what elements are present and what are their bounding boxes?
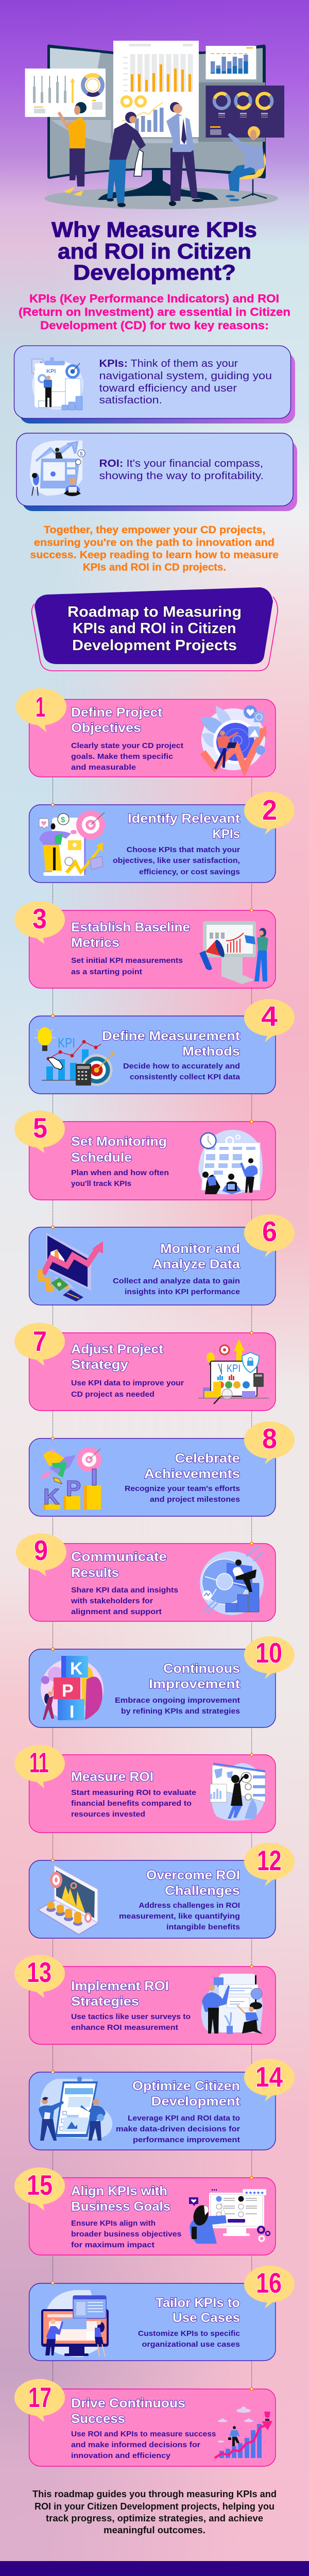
step 9 heading: Results	[71, 1566, 119, 1580]
step 12 heading: Overcome ROI	[146, 1868, 240, 1883]
connector node	[250, 2176, 253, 2179]
closing intro text: success. Keep reading to learn how to measure	[30, 549, 279, 561]
connector node	[52, 1648, 54, 1651]
icon: stacked KPI blocks: P	[62, 1681, 74, 1701]
title: and ROI in Citizen	[58, 239, 251, 263]
step 14 heading	[132, 2079, 241, 2109]
number bubble 4	[244, 999, 295, 1042]
number bubble 17: 17	[28, 2381, 52, 2413]
step 2 description: objectives, like user satisfaction,	[113, 856, 240, 865]
number bubble 6: 6	[262, 1215, 277, 1247]
step 2 description: Choose KPIs that match your	[127, 845, 240, 854]
number bubble 11	[14, 1745, 65, 1788]
connector node	[52, 1014, 54, 1018]
step 12 description	[119, 1901, 240, 1931]
step 14 description: performance improvement	[133, 2136, 240, 2144]
step 6 heading	[152, 1242, 241, 1272]
step 6 heading: Monitor and	[160, 1242, 240, 1256]
number bubble 14: 14	[255, 2061, 283, 2093]
panel: step 9	[16, 1533, 276, 1621]
number bubble 11: 11	[29, 1747, 48, 1778]
panel: ROI explanation	[16, 433, 297, 511]
icon: stacked KPI blocks	[41, 1656, 104, 1722]
number bubble 1: 1	[36, 691, 45, 723]
icon: KPI clipboard: KPI	[46, 368, 56, 375]
step 5 heading: Schedule	[71, 1150, 132, 1165]
step 16 heading: Use Cases	[173, 2311, 240, 2325]
step 9 description: Share KPI data and insights	[71, 1586, 178, 1595]
panel: step 4	[29, 999, 295, 1094]
step 3 description	[71, 956, 183, 976]
icon: monitor with rising pink arrow and coins	[38, 1233, 103, 1301]
connector node	[250, 1542, 253, 1545]
panel: step 11	[14, 1745, 276, 1833]
closing intro text: KPIs and ROI in CD projects.	[83, 562, 226, 573]
ROI text	[99, 457, 264, 482]
roadmap heading banner: KPIs and ROI in Citizen	[73, 620, 236, 637]
step 1 description: goals. Make them specific	[71, 752, 173, 761]
icon: KPI board with shield and coins	[198, 1339, 269, 1404]
roadmap heading banner	[32, 587, 278, 671]
step 7 description	[71, 1379, 184, 1399]
panel: step 7	[14, 1323, 276, 1411]
KPI text: KPIs: Think of them as your	[99, 358, 238, 369]
step 12 description: intangible benefits	[166, 1923, 240, 1931]
step 5 description: Plan when and how often	[71, 1168, 169, 1177]
step 15 description: broader business objectives	[71, 2230, 181, 2239]
step 17 description	[71, 2430, 216, 2460]
step 1 heading	[71, 705, 163, 735]
dark donut panel	[206, 86, 284, 138]
connector node	[250, 2387, 253, 2391]
panel: step 3	[14, 901, 276, 988]
icon: climbing bar chart with trophy	[215, 2406, 272, 2458]
step 9 heading	[71, 1550, 167, 1580]
step 17 description: innovation and efficiency	[71, 2451, 171, 2460]
step 17 description: and make informed decisions for	[71, 2441, 200, 2449]
KPI text: navigational system, guiding you	[99, 370, 272, 382]
number bubble 16: 16	[256, 2267, 282, 2299]
number bubble 13	[14, 1955, 65, 1998]
step 13 heading: Strategies	[71, 1994, 139, 2009]
ROI text: ROI: It's your financial compass,	[99, 457, 263, 469]
number bubble 7	[14, 1323, 65, 1366]
closing statement	[32, 2489, 277, 2535]
number bubble 4: 4	[261, 1000, 278, 1032]
connector node	[250, 909, 253, 912]
step 15 heading: Align KPIs with	[71, 2184, 167, 2198]
step 8 heading	[144, 1451, 240, 1481]
ROI text: showing the way to profitability.	[99, 470, 264, 482]
panel: step 8	[29, 1421, 295, 1516]
panel: step 10	[29, 1636, 295, 1727]
KPI text	[99, 358, 272, 406]
icon: KPI podium with rocket rider: P	[66, 1476, 81, 1501]
left chart panel	[25, 69, 106, 117]
step 15 description: for maximum impact	[71, 2241, 154, 2249]
step 10 heading	[149, 1662, 241, 1691]
connector node	[52, 803, 54, 806]
step 6 description: insights into KPI performance	[125, 1287, 240, 1296]
number bubble 5: 5	[33, 1112, 47, 1144]
icon: KPI chart, bulb, calculator and target: KPI	[58, 1035, 75, 1050]
step 9 heading: Communicate	[71, 1550, 167, 1564]
step 4 description: Decide how to accurately and	[123, 1062, 240, 1071]
step 4 heading: Define Measurement	[102, 1029, 241, 1043]
step 16 description: Customize KPIs to specific	[138, 2329, 240, 2338]
step 10 description	[115, 1696, 240, 1716]
hero illustration: team reviewing KPI dashboards	[25, 41, 284, 209]
number bubble 5	[14, 1111, 65, 1153]
number bubble 8: 8	[262, 1422, 277, 1454]
step 13 description: Use tactics like user surveys to	[71, 2012, 191, 2021]
title: Development?	[73, 260, 236, 284]
step 5 description	[71, 1168, 169, 1188]
step 1 heading: Define Project	[71, 705, 163, 720]
step 3 heading: Metrics	[71, 936, 119, 950]
number bubble 13: 13	[27, 1956, 52, 1988]
icon: KPI clipboard	[32, 357, 83, 410]
connector node	[52, 1226, 54, 1229]
icon: team customizing monitor layout	[41, 2290, 109, 2357]
number bubble 9: 9	[34, 1534, 48, 1566]
icon: team with survey phone	[201, 1974, 263, 2034]
number bubble 8	[244, 1421, 295, 1464]
step 7 heading: Adjust Project	[71, 1342, 164, 1357]
step 5 description: you'll track KPIs	[71, 1179, 131, 1188]
step 2 description: efficiency, or cost savings	[139, 868, 240, 876]
step 13 heading: Implement ROI	[71, 1979, 169, 1993]
title	[52, 217, 257, 284]
step 15 heading	[71, 2184, 170, 2214]
central chart panel	[113, 41, 199, 137]
icon: team planning schedule	[198, 1130, 263, 1194]
connector node	[250, 1753, 253, 1756]
step 4 description: consistently collect KPI data	[130, 1073, 241, 1081]
step 7 description: Use KPI data to improve your	[71, 1379, 184, 1387]
step 2 heading: KPIs	[212, 827, 240, 841]
title: Why Measure KPIs	[52, 217, 257, 242]
step 12 description: measurement, like quantifying	[119, 1912, 240, 1921]
connector lines	[53, 777, 252, 2396]
step 4 heading	[102, 1029, 241, 1059]
number bubble 6	[244, 1214, 295, 1257]
icon: person with target and yellow arrow: $	[61, 816, 65, 824]
step 13 heading	[71, 1979, 169, 2009]
step 12 description: Address challenges in ROI	[139, 1901, 240, 1910]
icon: two people with checklist board	[39, 2077, 112, 2141]
step 10 heading: Improvement	[149, 1677, 241, 1691]
footer	[0, 2561, 309, 2576]
number bubble 3	[14, 901, 65, 944]
connector node	[250, 1331, 253, 1334]
step 8 heading: Achievements	[144, 1467, 240, 1481]
number bubble 2: 2	[262, 794, 277, 826]
icon: ROI growth dashboard: $	[80, 451, 83, 457]
step 2 description	[113, 845, 240, 876]
number bubble 10	[244, 1636, 295, 1679]
panel: KPIs explanation	[14, 346, 295, 423]
step 17 description: Use ROI and KPIs to measure success	[71, 2430, 216, 2438]
closing intro text	[30, 524, 279, 573]
step 10 heading: Continuous	[163, 1662, 240, 1676]
icon: KPI board with shield and coins: KPI	[227, 1363, 241, 1375]
closing statement: track progress, optimize strategies, and achieve	[46, 2513, 263, 2523]
step 15 description: Ensure KPIs align with	[71, 2219, 156, 2228]
panel: step 6	[29, 1214, 295, 1305]
connector node	[52, 2071, 54, 2074]
step 16 heading	[156, 2296, 240, 2325]
step 12 heading	[146, 1868, 240, 1898]
connector node	[52, 2281, 54, 2284]
number bubble 16	[244, 2266, 295, 2309]
connector node	[250, 1965, 253, 1968]
icon: KPI podium with rocket rider	[41, 1447, 101, 1510]
step 11 description: financial benefits compared to	[71, 1799, 192, 1808]
number bubble 15: 15	[27, 2169, 53, 2201]
step 11 heading: Measure ROI	[71, 1770, 153, 1784]
intro text	[19, 292, 290, 332]
step 9 description: alignment and support	[71, 1607, 162, 1616]
icon: donut chart with seated person	[200, 1546, 264, 1615]
step 9 description: with stakeholders for	[71, 1597, 153, 1605]
step 14 heading: Development	[151, 2094, 241, 2109]
number bubble 14	[244, 2059, 295, 2102]
step 15 description	[71, 2219, 181, 2249]
icon: woman selecting ratings on monitor	[189, 2189, 270, 2244]
number bubble 12	[244, 1843, 295, 1886]
step 8 heading: Celebrate	[175, 1451, 240, 1466]
intro text: KPIs (Key Performance Indicators) and ROI	[29, 292, 279, 305]
step 2 heading: Identify Relevant	[128, 811, 241, 826]
step 6 description	[113, 1277, 240, 1296]
closing statement: ROI in your Citizen Development projects, helping you	[35, 2501, 274, 2512]
step 1 description: Clearly state your CD project	[71, 741, 183, 750]
number bubble 12: 12	[257, 1844, 281, 1876]
step 7 heading	[71, 1342, 164, 1372]
step 14 description: Leverage KPI and ROI data to	[128, 2114, 240, 2123]
step 3 description: Set initial KPI measurements	[71, 956, 183, 965]
KPI text: toward efficiency and user	[99, 382, 237, 394]
step 13 description	[71, 2012, 191, 2032]
icon: KPI chart, bulb, calculator and target	[34, 1026, 114, 1086]
top right chart panel	[206, 46, 256, 79]
intro text: Development (CD) for two key reasons:	[40, 319, 269, 332]
icon: ROI growth dashboard	[30, 440, 85, 496]
panel: step 15	[14, 2167, 276, 2255]
roadmap heading banner: Development Projects	[72, 637, 237, 654]
step 6 heading: Analyze Data	[152, 1257, 241, 1272]
step 15 heading: Business Goals	[71, 2199, 170, 2214]
step 16 heading: Tailor KPIs to	[156, 2296, 240, 2310]
connector node	[250, 1120, 253, 1123]
step 10 description: Embrace ongoing improvement	[115, 1696, 240, 1705]
step 3 heading: Establish Baseline	[71, 920, 190, 935]
step 14 heading: Optimize Citizen	[132, 2079, 240, 2093]
step 3 description: as a starting point	[71, 968, 142, 976]
KPI text: satisfaction.	[99, 394, 162, 406]
man in blue jacket	[166, 102, 203, 206]
panel: step 1	[16, 688, 276, 777]
panel: step 2	[29, 792, 295, 883]
step 6 description: Collect and analyze data to gain	[113, 1277, 240, 1285]
number bubble 9	[16, 1533, 66, 1577]
step 3 heading	[71, 920, 190, 950]
step 1 heading: Objectives	[71, 721, 141, 735]
step 5 heading: Set Monitoring	[71, 1134, 167, 1149]
closing statement: This roadmap guides you through measuring KPIs and	[32, 2489, 277, 2499]
closing intro text: Together, they empower your CD projects,	[44, 524, 266, 536]
step 8 description: and project milestones	[150, 1495, 240, 1504]
icon: KPI podium with rocket rider: K	[43, 1484, 60, 1510]
icon: target and climbing arrow	[201, 705, 266, 770]
panel: step 5	[14, 1111, 276, 1200]
panel: step 14	[29, 2059, 295, 2150]
number bubble 7: 7	[33, 1325, 47, 1357]
step 17 heading: Success	[71, 2412, 125, 2426]
number bubble 1	[16, 688, 66, 732]
step 4 heading: Methods	[182, 1044, 240, 1059]
roadmap heading banner: Roadmap to Measuring	[67, 604, 242, 620]
step 2 heading	[128, 811, 241, 841]
step 9 description	[71, 1586, 178, 1616]
closing statement: meaningful outcomes.	[104, 2525, 205, 2535]
step 7 heading: Strategy	[71, 1358, 128, 1372]
panel: step 12	[29, 1843, 295, 1938]
number bubble 17	[14, 2379, 65, 2422]
icon: stacked KPI blocks: I	[70, 1702, 74, 1722]
step 12 heading: Challenges	[165, 1884, 240, 1898]
step 5 heading	[71, 1134, 167, 1165]
step 11 description: Start measuring ROI to evaluate	[71, 1788, 196, 1797]
closing intro text: ensuring you're on the path to innovation and	[34, 537, 274, 548]
number bubble 2	[244, 792, 295, 835]
step 10 description: by refining KPIs and strategies	[121, 1707, 240, 1716]
step 7 description: CD project as needed	[71, 1390, 154, 1399]
step 13 description: enhance ROI measurement	[71, 2023, 178, 2032]
step 16 description: organizational use cases	[142, 2340, 240, 2349]
panel: step 17	[14, 2379, 276, 2466]
woman on chair	[226, 126, 267, 201]
man in dark jacket	[107, 112, 146, 207]
icon: person with target and yellow arrow	[39, 810, 105, 876]
icon: woman selecting ratings on monitor: ★★★★★	[245, 2190, 264, 2195]
step 1 description: and measurable	[71, 763, 136, 772]
step 17 heading: Drive Continuous	[71, 2396, 185, 2411]
panel: step 16	[29, 2266, 295, 2361]
step 16 description	[138, 2329, 240, 2349]
woman in yellow pointing	[59, 102, 87, 195]
panel: step 13	[14, 1955, 276, 2044]
step 14 description: make data-driven decisions for	[116, 2125, 240, 2133]
step 17 heading	[71, 2396, 185, 2426]
step 11 description	[71, 1788, 196, 1819]
number bubble 3: 3	[32, 903, 47, 935]
icon: laptop with coins and targets	[38, 1865, 98, 1935]
step 8 description: Recognize your team's efforts	[125, 1484, 240, 1493]
step 14 description	[116, 2114, 240, 2144]
number bubble 10: 10	[255, 1637, 282, 1669]
step 4 description	[123, 1062, 241, 1081]
icon: person reviewing world dashboard	[210, 1763, 265, 1821]
number bubble 15	[14, 2167, 65, 2211]
icon: stacked KPI blocks: K	[70, 1659, 83, 1679]
icon: megaphone and chart board	[199, 921, 268, 984]
step 8 description	[125, 1484, 240, 1504]
intro text: (Return on Investment) are essential in Citizen	[19, 306, 290, 318]
step 1 description	[71, 741, 183, 772]
connector node	[52, 1437, 54, 1440]
connector node	[52, 1859, 54, 1862]
step 11 description: resources invested	[71, 1810, 145, 1819]
